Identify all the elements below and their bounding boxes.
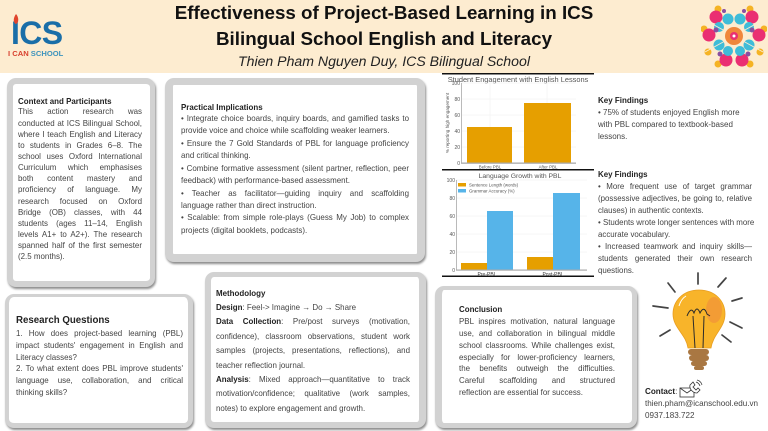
text: research questions: language use, collaboration, and critical xyxy=(16,376,183,385)
subtitle: Thien Pham Nguyen Duy, ICS Bilingual School xyxy=(238,53,530,69)
text: methodology xyxy=(216,288,410,413)
text: context: (2.5 months). xyxy=(18,252,65,261)
text: practical implications: language rather than direct instruction. xyxy=(181,201,316,210)
text: key findings 1: • 75% of students enjoyed English more xyxy=(598,108,740,117)
text: practical implications: • Combine formative assessment (silent partner, reflection, peer xyxy=(181,164,409,173)
bar chart: student engagement: After PBL xyxy=(539,164,558,170)
text: practical implications: • Teacher as facilitator—guiding inquiry and scaffolding xyxy=(181,189,409,198)
title: Bilingual School English and Literacy xyxy=(216,28,552,49)
bar chart: student engagement: Student Engagement with English Lessons xyxy=(448,75,589,84)
text: key findings 2: (possessive adjectives, be going to, relative xyxy=(598,194,752,203)
text: key findings 1 xyxy=(598,96,740,141)
bar chart: student engagement xyxy=(442,73,594,170)
text: methodology: teacher reflection journal. xyxy=(216,361,305,370)
text: conclusion: school classrooms. While challenges exist, xyxy=(459,341,615,350)
bar chart: student engagement: % reporting high engagement xyxy=(445,92,450,153)
bar chart: student engagement: 80 xyxy=(454,97,460,103)
bar chart: language growth: Grammar Accuracy (%) xyxy=(469,188,515,194)
panel: context and participants xyxy=(6,78,158,290)
text: research questions: 1. How does project-based learning (PBL) xyxy=(16,329,183,338)
text: conclusion xyxy=(459,317,615,397)
bar chart: language growth: Sentence Length (words) xyxy=(469,182,519,188)
text: methodology: Data Collection: Pre/post surveys (motivation, xyxy=(216,317,410,326)
text: key findings 2: Key Findings xyxy=(598,170,648,179)
panel: research questions xyxy=(4,294,196,431)
text: key findings 2: clauses) in authentic contexts. xyxy=(598,206,704,215)
text: contact: thien.pham@icanschool.edu.vn xyxy=(645,399,758,408)
text: context: Bridge (OB) classes, with 44 xyxy=(18,208,142,217)
text: conclusion: Careful scaffolding and structured xyxy=(459,376,615,385)
panel: conclusion xyxy=(434,286,640,431)
bar chart: student engagement: 100 xyxy=(452,81,460,87)
bar chart: language growth: 40 xyxy=(449,232,455,238)
text: context: where I teach English and Literacy xyxy=(18,130,142,139)
text: practical implications: • Ensure the 7 Gold Standards of PBL for language proficiency xyxy=(181,139,409,148)
bar chart: language growth: 100 xyxy=(447,178,455,184)
text: context: proficiency of language. My xyxy=(18,185,142,194)
text: methodology: samples (projects, presentations, reflections), and xyxy=(216,346,410,355)
text: context: to students in Grades 6–8. The xyxy=(18,141,142,150)
title: Effectiveness of Project-Based Learning in ICS xyxy=(175,2,593,23)
text: research questions: impact students' engagement in English and xyxy=(16,341,183,350)
text: context: conducted at ICS Bilingual School, xyxy=(18,119,142,128)
text: conclusion: especially for lower-proficiency learners, xyxy=(459,353,615,362)
text: contact: 0937.183.722 xyxy=(645,411,695,420)
bar chart: language growth: 60 xyxy=(449,214,455,220)
text: practical implications: feedback) with performance-based assessment. xyxy=(181,176,350,185)
bar chart: student engagement: Before PBL xyxy=(479,164,502,170)
text: conclusion: reflection are essential for success. xyxy=(459,388,583,397)
title xyxy=(175,2,593,49)
text: methodology: confidence), classroom observations, student work xyxy=(216,332,410,341)
text: key findings 2: • Students wrote longer sentences with more xyxy=(598,218,754,227)
icon: mandala xyxy=(701,6,767,68)
text: context: Curriculum which emphasises xyxy=(18,163,142,172)
text: methodology: Methodology xyxy=(216,288,265,298)
text: key findings 2: • Increased teamwork and inquiry skills— xyxy=(598,242,752,251)
text: context: spanned half of the first semester xyxy=(18,241,142,250)
panel: practical implications xyxy=(164,78,428,266)
bar chart: language growth: 0 xyxy=(452,268,455,274)
text: methodology: notes) to explore engagement and growth. xyxy=(216,404,365,413)
icon: envelope and phone xyxy=(680,380,702,398)
text: methodology: motivation/confidence; qualitative (work samples, xyxy=(216,389,410,398)
text: key findings 1: Key Findings xyxy=(598,96,648,105)
text: methodology: Analysis: Mixed approach—quantitative to track xyxy=(216,375,410,384)
text: key findings 2: students generated their own research xyxy=(598,254,752,263)
text: context: school uses Oxford International xyxy=(18,152,142,161)
text: research questions: thinking skills? xyxy=(16,388,67,397)
text: practical implications: provide voice and choice while scaffolding weaker learners. xyxy=(181,126,390,135)
logo: ICS I Can School: I CAN SCHOOL xyxy=(8,49,63,58)
text: practical implications: • Integrate choice boards, inquiry boards, and gamified tasks to xyxy=(181,114,409,123)
text: conclusion: use, and collaboration in bilingual middle xyxy=(459,329,615,338)
text: research questions: 2. To what extent does PBL improve students' xyxy=(16,364,183,373)
text: context: This action research was xyxy=(18,107,142,116)
bar chart: student engagement: 40 xyxy=(454,129,460,135)
heading: research questions: Research Questions xyxy=(16,315,110,326)
logo: ICS I Can School: ICS xyxy=(11,15,63,51)
bar chart: language growth: 80 xyxy=(449,196,455,202)
text: context xyxy=(18,107,142,261)
text: key findings 1: with PBL compared to textbook-based xyxy=(598,120,733,129)
text: methodology: Design: Feel-> Imagine → Do → Share xyxy=(216,303,356,312)
text: practical implications: • Scalable: from simple role-plays (Guess My Job) to complex xyxy=(181,213,409,222)
text: context: levels A1+ to A2+). The research xyxy=(18,230,142,239)
text: key findings 1: lessons. xyxy=(598,132,627,141)
bar chart: language growth: Language Growth with PBL xyxy=(479,173,562,180)
text: key findings 2 xyxy=(598,170,754,275)
bar chart: student engagement: 20 xyxy=(454,145,460,151)
text: contact xyxy=(645,387,758,420)
text: practical implications xyxy=(181,114,409,235)
bar chart: student engagement: 60 xyxy=(454,113,460,119)
text: context: research focused on Oxford xyxy=(18,197,142,206)
text: contact: Contact: xyxy=(645,387,677,396)
bar chart: student engagement: 0 xyxy=(457,161,460,167)
text: research questions xyxy=(16,329,183,397)
bar chart: language growth: 20 xyxy=(449,250,455,256)
text: context: students (ages 11–14, English xyxy=(18,219,142,228)
text: practical implications: projects (digital booklets, podcasts). xyxy=(181,226,307,235)
text: key findings 2: questions. xyxy=(598,266,634,275)
text: practical implications: and critical thinking. xyxy=(181,151,251,160)
text: conclusion: PBL inspires motivation, natural language xyxy=(459,317,615,326)
heading: practical implications: Practical Implications xyxy=(181,102,263,112)
text: key findings 2: accurate vocabulary. xyxy=(598,230,670,239)
text: context: both content mastery and xyxy=(18,174,142,183)
panel: methodology xyxy=(204,272,428,431)
text: research questions: Literacy classes? xyxy=(16,353,77,362)
heading: context: Context and Participants xyxy=(18,97,112,106)
header band xyxy=(0,0,768,73)
heading: conclusion: Conclusion xyxy=(459,305,502,314)
text: key findings 2: • More frequent use of target grammar xyxy=(598,182,752,191)
icon: light bulb xyxy=(652,272,743,370)
text: conclusion: the benefits outweigh the difficulties. xyxy=(459,364,615,373)
bar chart: language growth xyxy=(442,169,594,277)
